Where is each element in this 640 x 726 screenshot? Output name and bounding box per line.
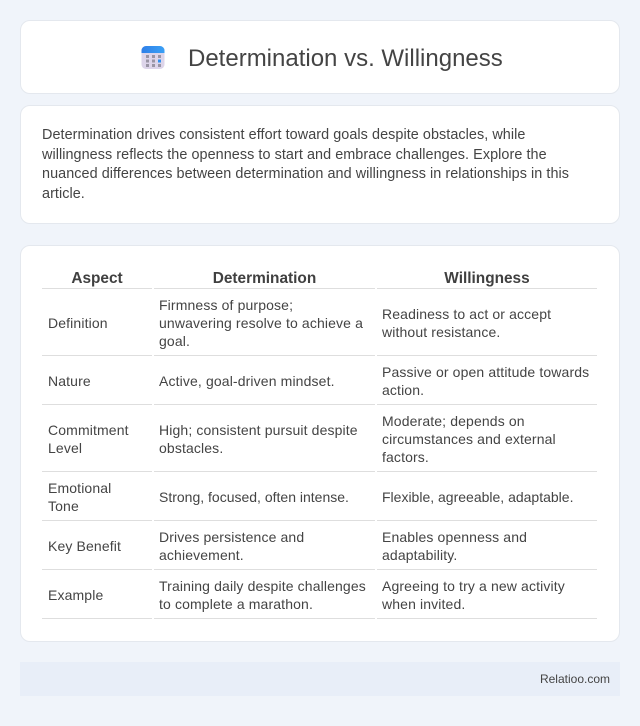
comparison table: Readiness to act or accept [382, 306, 551, 322]
comparison table: when invited. [382, 596, 465, 612]
header card [20, 20, 620, 94]
comparison table: Flexible, agreeable, adaptable. [382, 489, 573, 505]
comparison table: Passive or open attitude towards [382, 364, 589, 380]
comparison table: Enables openness and [382, 529, 527, 545]
row: example [48, 578, 565, 612]
comparison table: unwavering resolve to achieve a [159, 315, 363, 331]
intro panel [20, 105, 620, 224]
row: definition [48, 297, 551, 349]
comparison table: Moderate; depends on [382, 413, 525, 429]
comparison table: circumstances and external [382, 431, 556, 447]
intro text: nuanced differences between determination and willingness in relationships in this [42, 166, 569, 182]
icon: calendar [142, 46, 164, 69]
intro text [42, 127, 569, 202]
comparison table: Agreeing to try a new activity [382, 578, 565, 594]
comparison table: Tone [48, 498, 79, 514]
comparison table: Willingness [444, 270, 530, 287]
title: Determination vs. Willingness [188, 45, 503, 72]
comparison table: Active, goal-driven mindset. [159, 373, 335, 389]
comparison table: obstacles. [159, 440, 223, 456]
intro text: Determination drives consistent effort toward goals despite obstacles, while [42, 127, 525, 143]
footer text: Relatioo.com [540, 672, 610, 686]
comparison table: without resistance. [382, 324, 500, 340]
intro text: willingness reflects the openness to start and embrace challenges. Explore the [42, 146, 547, 162]
table panel [20, 245, 620, 642]
row: emotional tone [48, 480, 573, 514]
comparison table: Determination [213, 270, 316, 287]
comparison table: Drives persistence and [159, 529, 304, 545]
comparison table: adaptability. [382, 547, 457, 563]
comparison table: action. [382, 382, 424, 398]
comparison table: goal. [159, 333, 190, 349]
comparison table: Firmness of purpose; [159, 297, 293, 313]
column headers [71, 270, 530, 287]
intro text: article. [42, 186, 85, 202]
comparison table: Commitment [48, 422, 129, 438]
row: nature [48, 364, 589, 398]
comparison table: Nature [48, 373, 91, 389]
comparison table: achievement. [159, 547, 244, 563]
comparison table: Strong, focused, often intense. [159, 489, 349, 505]
comparison table: factors. [382, 449, 429, 465]
row: key benefit [48, 529, 527, 563]
row: commitment level [48, 413, 556, 465]
comparison table: to complete a marathon. [159, 596, 313, 612]
comparison table: Key Benefit [48, 538, 121, 554]
comparison table: Example [48, 587, 103, 603]
comparison table: Training daily despite challenges [159, 578, 366, 594]
comparison table: Level [48, 440, 82, 456]
comparison table: Emotional [48, 480, 111, 496]
comparison table: Definition [48, 315, 108, 331]
comparison table: Aspect [71, 270, 123, 287]
footer bar [20, 662, 620, 696]
comparison table: High; consistent pursuit despite [159, 422, 358, 438]
